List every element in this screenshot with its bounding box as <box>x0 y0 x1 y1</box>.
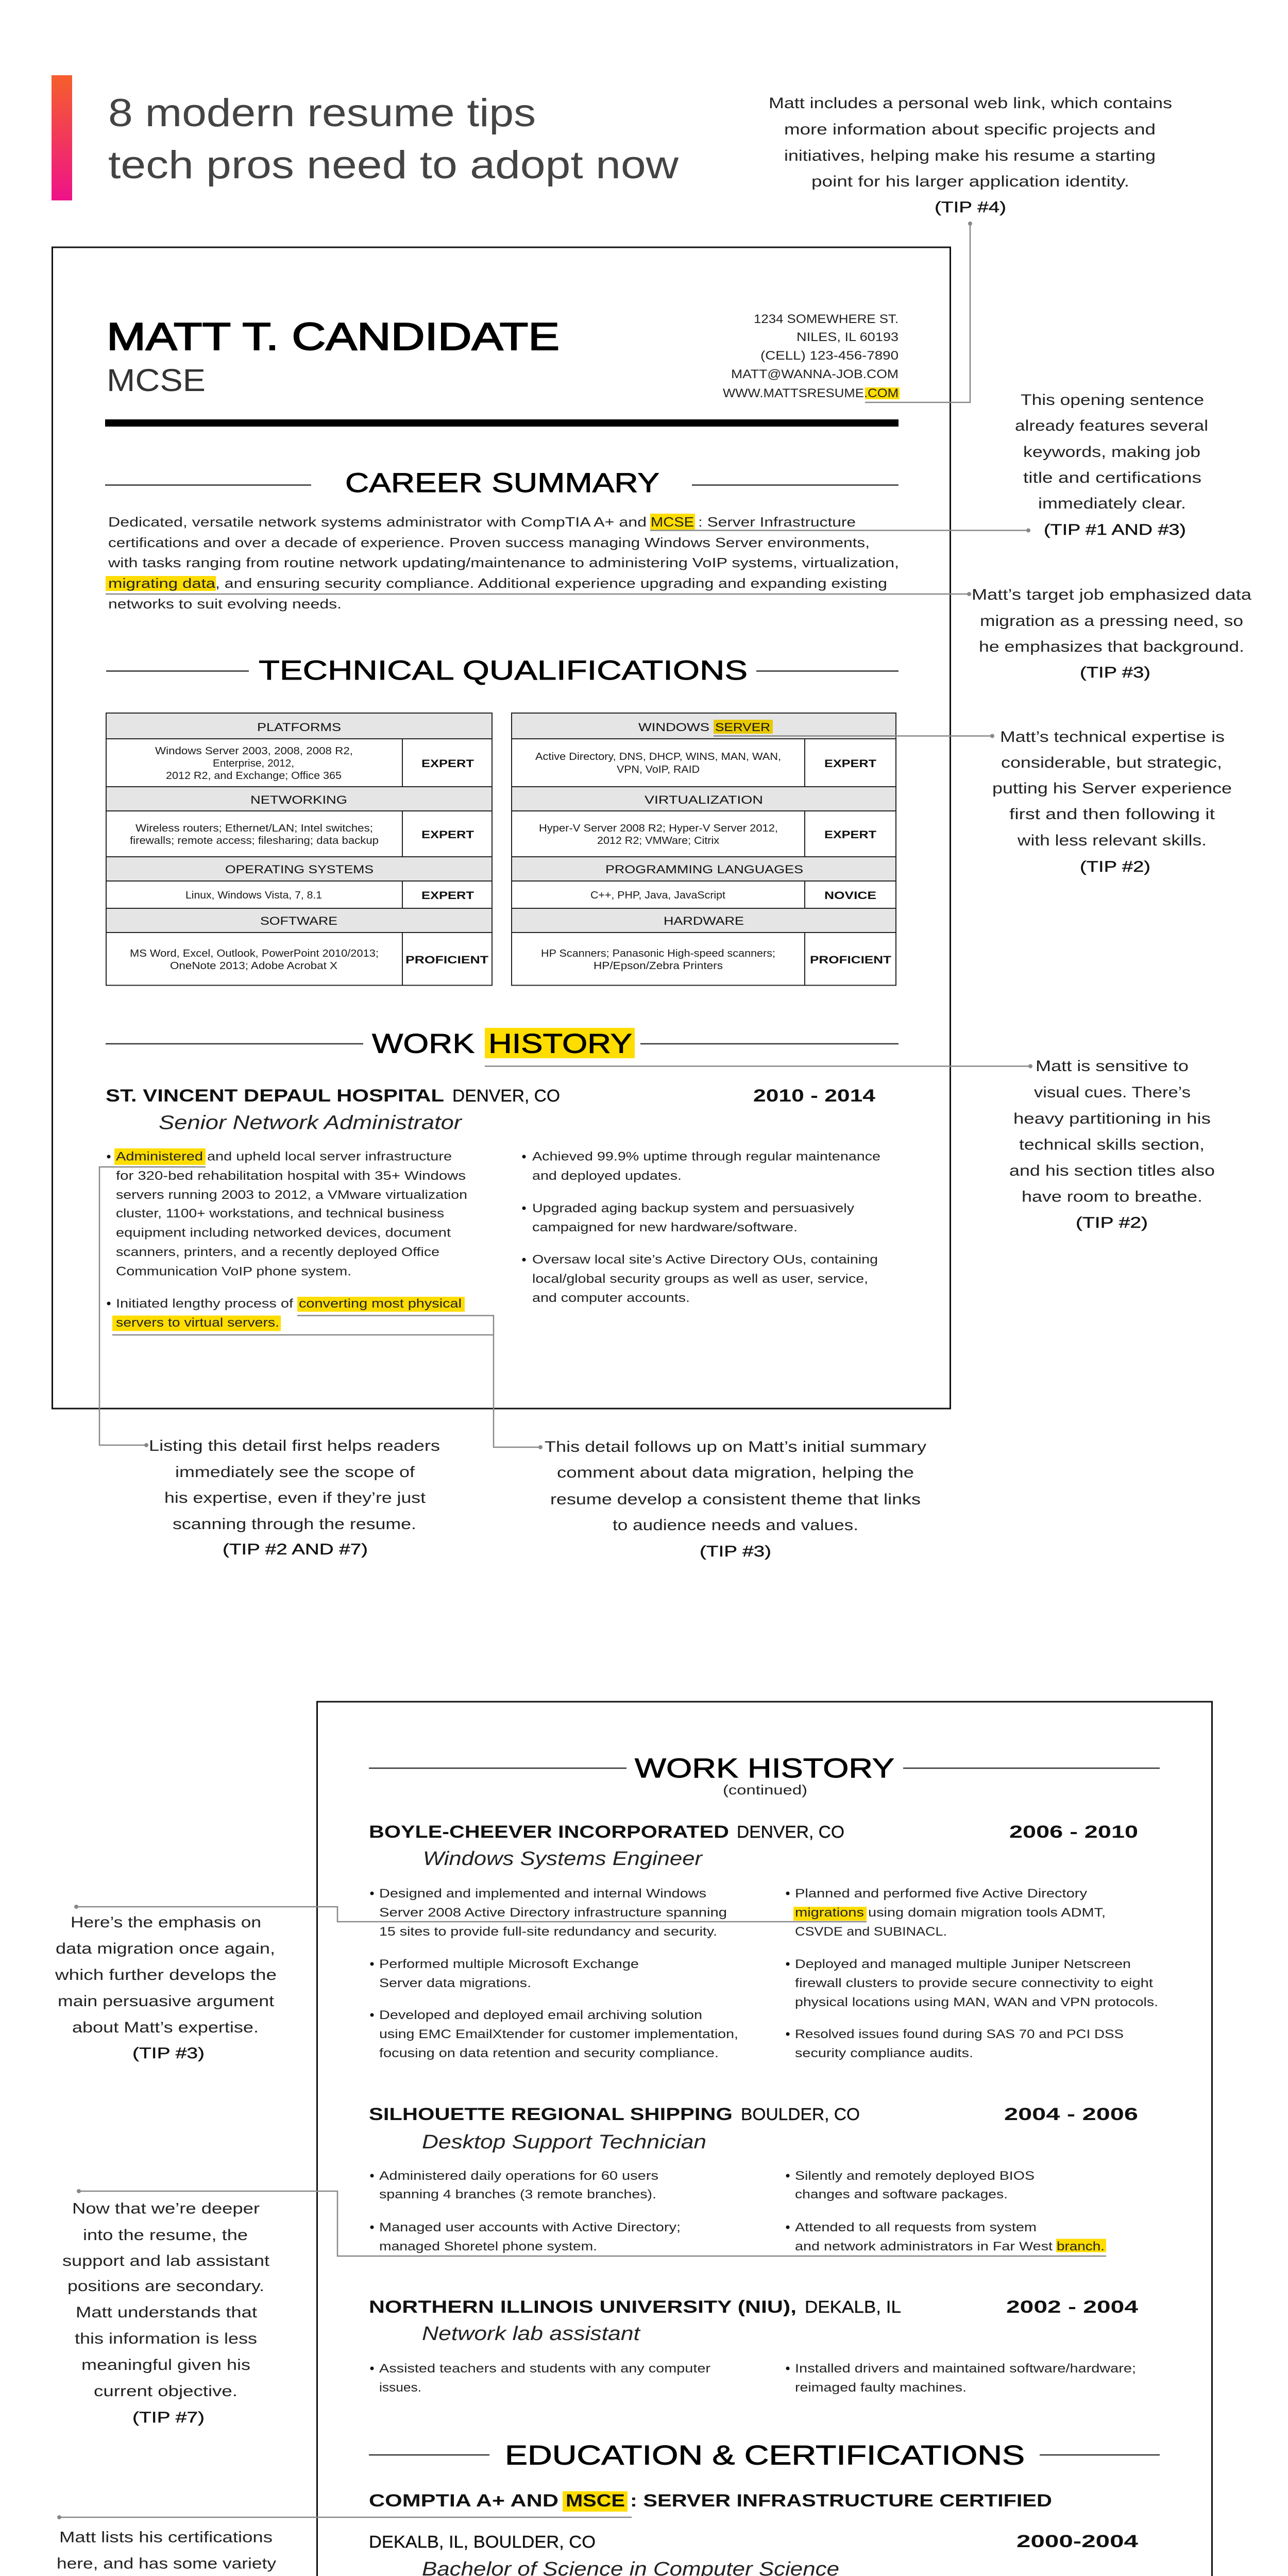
degree: 2000-2004 <box>1016 2532 1138 2551</box>
skills table: left: Windows Server 2003, 2008, 2008 R2, <box>155 745 353 757</box>
callout: certifications keyword density <box>57 2529 276 2576</box>
contact details: 1234 SOMEWHERE ST. <box>754 312 899 326</box>
heading: work history <box>106 1028 899 1059</box>
skills table: left: SOFTWARE <box>260 914 337 927</box>
job bullets: left: Administered <box>116 1150 203 1163</box>
credential: MCSE <box>107 363 206 398</box>
callout: personal web link: initiatives, helping make his resume a starting <box>784 147 1156 164</box>
callout: opening sentence: title and certifications <box>1023 469 1201 486</box>
title: tech pros need to adopt now <box>108 143 679 187</box>
callout: data migration target: migration as a pressing need, so <box>980 613 1243 630</box>
header rule <box>105 419 899 427</box>
arrow: branch to secondary positions <box>77 2189 1106 2256</box>
Silhouette bullets: managed Shoretel phone system. <box>379 2240 597 2253</box>
callout: listing this detail first: Listing this detail first helps readers <box>149 1437 440 1454</box>
skills table: right: 2012 R2; VMWare; Citrix <box>597 835 719 846</box>
job bullets: left: scanners, printers, and a recently deployed Office <box>116 1245 439 1259</box>
callout: technical expertise: Matt’s technical expertise is <box>1000 728 1225 745</box>
callout: personal web link: more information about specific projects and <box>784 121 1156 138</box>
callout: follows up on summary: to audience needs and values. <box>613 1517 858 1534</box>
Boyle-Cheever bullets: using EMC EmailXtender for customer implementation, <box>379 2027 738 2041</box>
Silhouette bullets: and network administrators in Far West <box>795 2240 1053 2253</box>
arrow: history to visual cues <box>485 1064 1032 1069</box>
Silhouette bullets: Managed user accounts with Active Directory; <box>379 2221 681 2234</box>
skills table: left: PROFICIENT <box>405 954 488 966</box>
career summary text: : Server Infrastructure <box>698 514 856 530</box>
callout: technical expertise: (TIP #2) <box>1080 858 1150 875</box>
contact details: (CELL) 123-456-7890 <box>760 349 899 363</box>
callout: technical expertise: putting his Server experience <box>992 780 1232 797</box>
callout: personal web link: (TIP #4) <box>935 199 1006 216</box>
job: Silhouette Regional Shipping <box>369 2105 1138 2153</box>
Boyle-Cheever bullets: Planned and performed five Active Directory <box>795 1887 1087 1901</box>
career summary text: Dedicated, versatile network systems administrator with CompTIA A+ and <box>108 514 647 530</box>
Boyle-Cheever bullets: Deployed and managed multiple Juniper Netscreen <box>795 1957 1131 1971</box>
title: 8 modern resume tips <box>108 91 536 135</box>
page frame <box>317 1702 1212 2576</box>
job bullets: right: campaigned for new hardware/software. <box>532 1221 798 1234</box>
skills table: left: OneNote 2013; Adobe Acrobat X <box>170 960 337 972</box>
job: St. Vincent DePaul Hospital: 2010 - 2014 <box>753 1086 875 1106</box>
degree: DEKALB, IL, BOULDER, CO <box>369 2532 596 2551</box>
skills table: left: EXPERT <box>421 890 474 902</box>
job: Silhouette Regional Shipping: 2004 - 2006 <box>1004 2105 1138 2124</box>
callout: visual cues: have room to breathe. <box>1022 1188 1202 1206</box>
title <box>108 91 679 187</box>
job: Boyle-Cheever Incorporated: BOYLE-CHEEVER INCORPORATED <box>369 1822 729 1842</box>
callout: emphasis on data migration: (TIP #3) <box>132 2045 205 2062</box>
callout: certifications keyword density: here, and has some variety <box>57 2555 276 2572</box>
job bullets: left: and upheld local server infrastructure <box>207 1150 452 1163</box>
callout: listing this detail first <box>149 1437 440 1558</box>
skills table: left: EXPERT <box>421 758 474 770</box>
job bullets: left: converting most physical <box>299 1297 462 1311</box>
NIU bullets: issues. <box>379 2381 421 2395</box>
Boyle-Cheever bullets: Server data migrations. <box>379 1976 531 1990</box>
callout: support positions secondary: this information is less <box>75 2330 257 2347</box>
certification line: MSCE <box>566 2491 625 2511</box>
skills table: right: HP/Epson/Zebra Printers <box>594 960 723 972</box>
callout: opening sentence <box>1015 392 1208 538</box>
Silhouette bullets: Administered daily operations for 60 users <box>379 2169 658 2183</box>
job: Boyle-Cheever Incorporated: DENVER, CO <box>737 1822 844 1841</box>
callout: technical expertise: considerable, but strategic, <box>1001 754 1222 771</box>
job: Northern Illinois University: NORTHERN ILLINOIS UNIVERSITY (NIU), <box>369 2297 796 2317</box>
page frame <box>53 247 950 1409</box>
callout: listing this detail first: his expertise, even if they’re just <box>164 1489 426 1506</box>
job bullets: left: Communication VoIP phone system. <box>116 1264 351 1279</box>
job bullets: right: Upgraded aging backup system and persuasively <box>532 1201 854 1215</box>
callout: data migration target: Matt’s target job emphasized data <box>972 586 1251 603</box>
Boyle-Cheever bullets: using domain migration tools ADMT, <box>868 1906 1106 1920</box>
skills table: left: NETWORKING <box>250 793 347 806</box>
Boyle-Cheever bullets: Resolved issues found during SAS 70 and PCI DSS <box>795 2027 1124 2041</box>
heading: education and certifications: EDUCATION & CERTIFICATIONS <box>505 2440 1025 2471</box>
heading: work history: HISTORY <box>488 1028 632 1059</box>
job: Boyle-Cheever Incorporated: 2006 - 2010 <box>1009 1822 1138 1842</box>
callout: support positions secondary: into the resume, the <box>83 2227 248 2244</box>
callout: opening sentence: keywords, making job <box>1023 444 1200 461</box>
skills table: left: firewalls; remote access; filesharing; data backup <box>130 835 379 846</box>
skills table: left: MS Word, Excel, Outlook, PowerPoint 2010/2013; <box>130 948 379 959</box>
callout: personal web link: point for his larger application identity. <box>811 173 1129 190</box>
job: Boyle-Cheever Incorporated: Windows Systems Engineer <box>423 1848 703 1870</box>
job bullets: left: servers to virtual servers. <box>116 1316 279 1330</box>
skills table: right: EXPERT <box>824 758 876 770</box>
callout: data migration target <box>972 586 1251 681</box>
skills table: right: C++, PHP, Java, JavaScript <box>590 890 725 901</box>
NIU bullets: reimaged faulty machines. <box>795 2381 967 2395</box>
candidate name: MATT T. CANDIDATE <box>107 315 560 358</box>
skills table: right: PROFICIENT <box>810 954 891 966</box>
heading: work history: WORK <box>372 1028 474 1059</box>
callout: data migration target: (TIP #3) <box>1080 664 1150 681</box>
callout: visual cues: technical skills section, <box>1019 1137 1205 1153</box>
job bullets: right: and deployed updates. <box>532 1169 682 1183</box>
callout: opening sentence: (TIP #1 AND #3) <box>1044 521 1186 538</box>
heading: work history continued: (continued) <box>723 1782 807 1798</box>
Boyle-Cheever bullets: CSVDE and SUBINACL. <box>795 1925 947 1939</box>
Boyle-Cheever bullets <box>370 1887 1158 2060</box>
contact details: WWW.MATTSRESUME.COM <box>723 386 899 400</box>
career summary text: certifications and over a decade of experience. Proven success managing Windows Server environments, <box>108 535 870 550</box>
certification line: COMPTIA A+ AND <box>369 2491 558 2511</box>
job bullets: left: servers running 2003 to 2012, a VMware virtualization <box>116 1188 467 1202</box>
Silhouette bullets: spanning 4 branches (3 remote branches). <box>379 2188 656 2201</box>
callout: support positions secondary: current objective. <box>94 2383 238 2400</box>
callout: listing this detail first: immediately see the scope of <box>175 1464 415 1481</box>
NIU bullets: Assisted teachers and students with any computer <box>379 2362 710 2376</box>
callout: emphasis on data migration: about Matt’s expertise. <box>72 2019 259 2036</box>
Boyle-Cheever bullets: security compliance audits. <box>795 2046 973 2060</box>
job bullets: left: for 320-bed rehabilitation hospital with 35+ Windows <box>116 1169 466 1183</box>
job: St. Vincent DePaul Hospital: ST. VINCENT DEPAUL HOSPITAL <box>106 1086 444 1106</box>
arrow: MCSE to opening sentence <box>650 529 1030 533</box>
skills table: right: PROGRAMMING LANGUAGES <box>605 863 803 876</box>
job: Northern Illinois University <box>369 2297 1138 2345</box>
skills table: left <box>106 713 492 985</box>
callout: support positions secondary: (TIP #7) <box>132 2409 205 2426</box>
callout: visual cues: (TIP #2) <box>1076 1214 1148 1231</box>
job: Boyle-Cheever Incorporated <box>369 1822 1138 1870</box>
career summary text: , and ensuring security compliance. Additional experience upgrading and expanding existing <box>215 575 887 591</box>
career summary text: MCSE <box>651 514 694 530</box>
skills table: right: NOVICE <box>824 890 876 902</box>
heading: career summary: CAREER SUMMARY <box>345 468 659 498</box>
contact details <box>723 312 900 400</box>
job bullets: right: Achieved 99.9% uptime through regular maintenance <box>532 1150 880 1163</box>
job: Silhouette Regional Shipping: BOULDER, CO <box>741 2105 860 2124</box>
job: Silhouette Regional Shipping: Desktop Support Technician <box>422 2131 706 2153</box>
job: St. Vincent DePaul Hospital: DENVER, CO <box>452 1086 560 1105</box>
callout: follows up on summary: resume develop a consistent theme that links <box>550 1491 921 1508</box>
callout: technical expertise: first and then following it <box>1009 806 1215 823</box>
arrow: migrations to emphasis <box>74 1905 867 1922</box>
skills table: right: HARDWARE <box>664 914 744 927</box>
skills table: left: OPERATING SYSTEMS <box>225 863 374 876</box>
callout: emphasis on data migration: which further develops the <box>55 1967 277 1984</box>
callout: personal web link: Matt includes a personal web link, which contains <box>769 95 1172 112</box>
Boyle-Cheever bullets: focusing on data retention and security compliance. <box>379 2046 719 2060</box>
job bullets: left: equipment including networked devices, document <box>116 1226 451 1240</box>
Boyle-Cheever bullets: Designed and implemented and internal Windows <box>379 1887 706 1901</box>
Silhouette bullets: Silently and remotely deployed BIOS <box>795 2169 1035 2183</box>
career summary text: networks to suit evolving needs. <box>108 596 342 612</box>
job: St. Vincent DePaul Hospital: Senior Network Administrator <box>159 1112 463 1133</box>
NIU bullets <box>370 2362 1136 2395</box>
certification line <box>369 2491 1052 2512</box>
arrow: administered to listing detail <box>99 1167 206 1447</box>
job bullets: left <box>107 1148 467 1331</box>
Boyle-Cheever bullets: Developed and deployed email archiving solution <box>379 2008 702 2022</box>
callout: support positions secondary <box>62 2200 270 2426</box>
skills table: left: Enterprise, 2012, <box>213 758 294 769</box>
skills table: right: Active Directory, DNS, DHCP, WINS, MAN, WAN, <box>535 751 781 762</box>
arrow: migrating data to target job <box>106 592 971 596</box>
job bullets: right: local/global security groups as well as user, service, <box>532 1272 868 1286</box>
callout: opening sentence: This opening sentence <box>1021 392 1204 409</box>
skills table: right: SERVER <box>715 721 770 734</box>
arrow: converting to follow-up detail <box>112 1316 543 1449</box>
callout: emphasis on data migration: main persuasive argument <box>58 1993 275 2010</box>
heading: work history continued: WORK HISTORY <box>635 1753 894 1784</box>
leader lines <box>57 222 1106 2576</box>
callout: data migration target: he emphasizes that background. <box>979 638 1244 655</box>
skills table: right: EXPERT <box>824 829 876 841</box>
skills table: right: VIRTUALIZATION <box>645 793 763 806</box>
Boyle-Cheever bullets: Server 2008 Active Directory infrastructure spanning <box>379 1906 727 1920</box>
callout: opening sentence: immediately clear. <box>1038 495 1186 512</box>
callout: visual cues: and his section titles also <box>1009 1162 1215 1179</box>
Boyle-Cheever bullets: physical locations using MAN, WAN and VPN protocols. <box>795 1995 1158 2009</box>
callout: support positions secondary: Now that we’re deeper <box>72 2200 260 2217</box>
callout: follows up on summary: (TIP #3) <box>700 1543 771 1560</box>
skills table: right: WINDOWS <box>638 721 709 734</box>
degree <box>369 2532 1138 2576</box>
arrow: MSCE to certifications <box>57 2515 632 2519</box>
job: St. Vincent DePaul Hospital <box>106 1086 875 1133</box>
job: Northern Illinois University: DEKALB, IL <box>805 2297 901 2316</box>
job bullets: right <box>522 1150 880 1305</box>
skills table: left: Linux, Windows Vista, 7, 8.1 <box>185 890 322 901</box>
callout: visual cues: visual cues. There’s <box>1034 1084 1191 1101</box>
skills table: right <box>512 713 896 985</box>
panel: resume page 2 <box>317 1702 1212 2576</box>
callout: emphasis on data migration <box>55 1914 277 2062</box>
Boyle-Cheever bullets: migrations <box>795 1906 864 1920</box>
Boyle-Cheever bullets: firewall clusters to provide secure connectivity to eight <box>795 1976 1153 1990</box>
arrow: server to technical expertise <box>714 734 994 738</box>
callout: support positions secondary: support and lab assistant <box>62 2252 270 2269</box>
callout: emphasis on data migration: data migration once again, <box>56 1940 275 1957</box>
Boyle-Cheever bullets: 15 sites to provide full-site redundancy and security. <box>379 1925 717 1939</box>
career summary text: migrating data <box>108 575 216 591</box>
callout: personal web link <box>769 95 1172 216</box>
callout: listing this detail first: scanning through the resume. <box>173 1516 416 1533</box>
heading: technical qualifications: TECHNICAL QUALIFICATIONS <box>259 655 748 686</box>
skills table: left: Wireless routers; Ethernet/LAN; Intel switches; <box>135 823 373 834</box>
heading: work history continued <box>369 1753 1160 1798</box>
certification line: : SERVER INFRASTRUCTURE CERTIFIED <box>630 2491 1052 2511</box>
job bullets: right: and computer accounts. <box>532 1291 690 1305</box>
accent bar <box>52 75 72 200</box>
Silhouette bullets <box>370 2169 1106 2253</box>
callout: emphasis on data migration: Here’s the emphasis on <box>71 1914 261 1931</box>
Boyle-Cheever bullets: Performed multiple Microsoft Exchange <box>379 1957 639 1971</box>
callout: follows up on summary: This detail follows up on Matt’s initial summary <box>545 1438 926 1455</box>
skills table: right: HP Scanners; Panasonic High-speed scanners; <box>541 948 775 959</box>
callout: follows up on summary <box>545 1438 926 1560</box>
career summary text: with tasks ranging from routine network updating/maintenance to administering VoIP systems, virtualization, <box>108 555 899 570</box>
arrow: web link to tip 4 <box>865 222 972 402</box>
Silhouette bullets: changes and software packages. <box>795 2188 1008 2201</box>
NIU bullets: Installed drivers and maintained software/hardware; <box>795 2362 1136 2376</box>
callout: technical expertise: with less relevant skills. <box>1017 832 1207 849</box>
callout: visual cues <box>1009 1058 1215 1231</box>
callout: technical expertise <box>992 728 1232 875</box>
Silhouette bullets: Attended to all requests from system <box>795 2221 1037 2234</box>
career summary text <box>106 514 899 612</box>
callout: visual cues: Matt is sensitive to <box>1036 1058 1189 1075</box>
contact details: NILES, IL 60193 <box>796 330 899 344</box>
callout: visual cues: heavy partitioning in his <box>1013 1110 1211 1127</box>
contact details: MATT@WANNA-JOB.COM <box>731 367 899 381</box>
skills table: left: PLATFORMS <box>257 721 341 734</box>
callout: support positions secondary: positions are secondary. <box>67 2278 264 2295</box>
job bullets: right: Oversaw local site’s Active Directory OUs, containing <box>532 1253 878 1266</box>
callout: support positions secondary: meaningful given his <box>81 2357 250 2374</box>
callout: opening sentence: already features several <box>1015 417 1208 434</box>
job bullets: left: cluster, 1100+ workstations, and technical business <box>116 1207 444 1221</box>
skills table: right: Hyper-V Server 2008 R2; Hyper-V Server 2012, <box>539 823 778 834</box>
callout: support positions secondary: Matt understands that <box>76 2304 258 2321</box>
skills table: left: 2012 R2, and Exchange; Office 365 <box>166 770 342 782</box>
Silhouette bullets: branch. <box>1057 2240 1105 2253</box>
job: Northern Illinois University: Network lab assistant <box>422 2323 641 2345</box>
panel: resume page 1 <box>53 247 950 1409</box>
skills table: left: EXPERT <box>421 829 474 841</box>
skills table: right: VPN, VoIP, RAID <box>617 764 700 775</box>
job: Northern Illinois University: 2002 - 2004 <box>1006 2297 1138 2317</box>
callout: certifications keyword density: Matt lists his certifications <box>59 2529 273 2546</box>
job bullets: left: Initiated lengthy process of <box>116 1297 293 1311</box>
callout: follows up on summary: comment about data migration, helping the <box>557 1464 914 1481</box>
job: Silhouette Regional Shipping: SILHOUETTE REGIONAL SHIPPING <box>369 2105 733 2124</box>
callout: listing this detail first: (TIP #2 AND #7) <box>223 1541 368 1558</box>
